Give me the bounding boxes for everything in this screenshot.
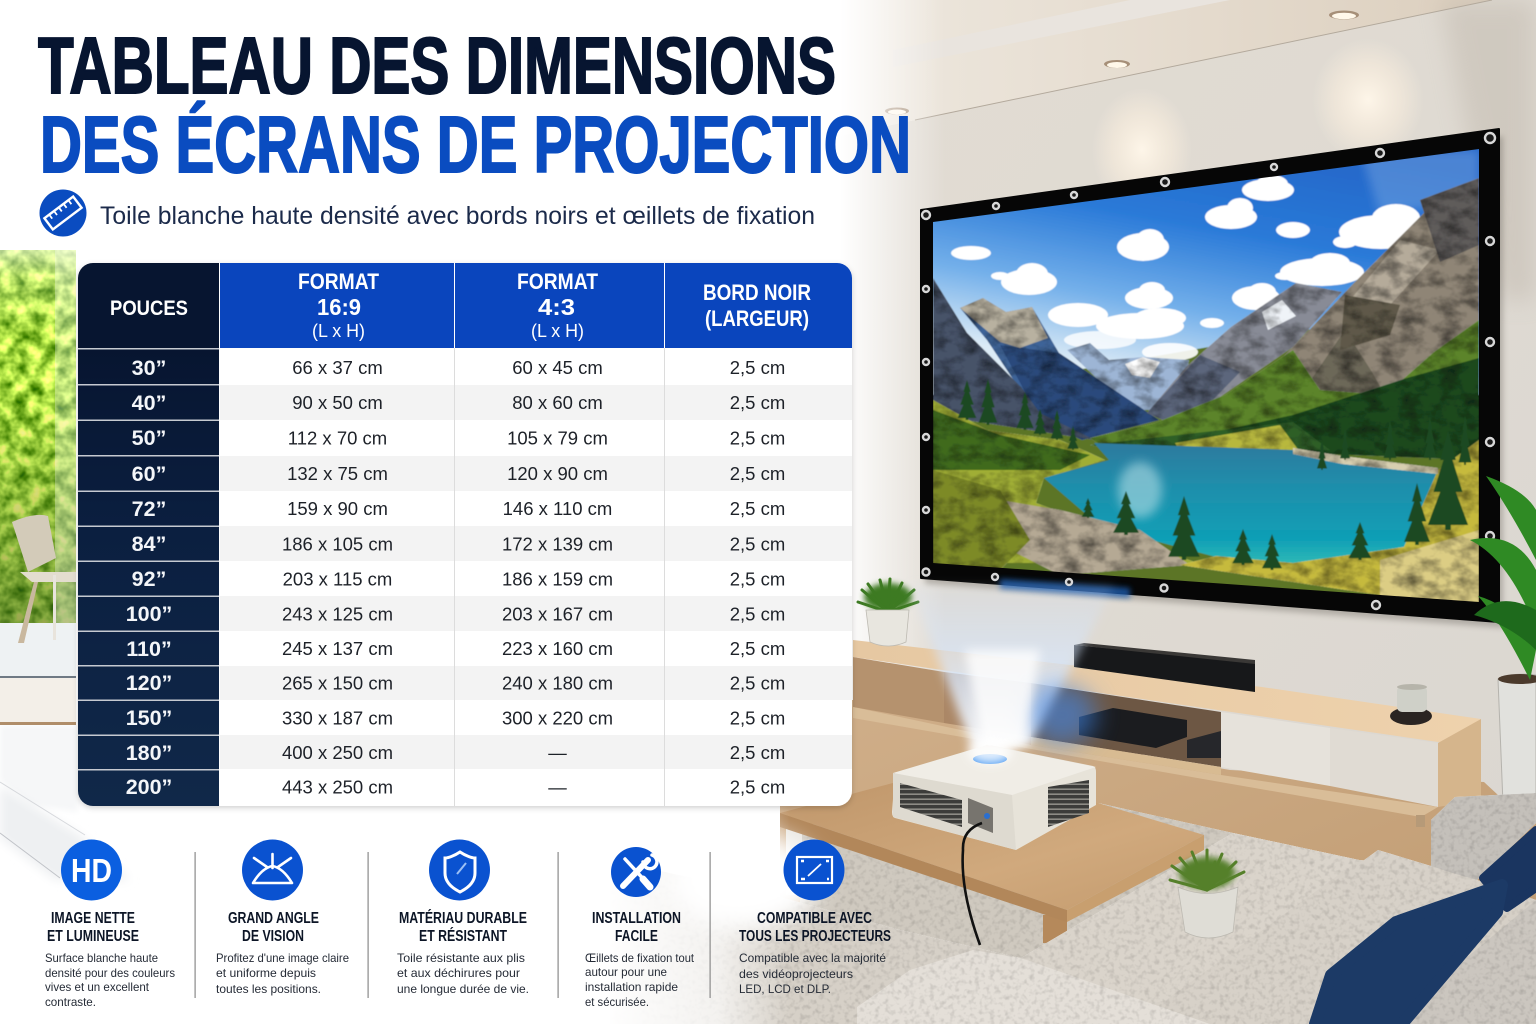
terrace floor xyxy=(0,623,76,678)
description: Toile résistante aux plis xyxy=(397,951,525,965)
table rows: 2,5 cm xyxy=(730,708,785,728)
feature dividers xyxy=(194,852,711,998)
description: densité pour des couleurs xyxy=(45,966,175,980)
right shore and foreground meadow xyxy=(1180,440,1479,610)
icon: viewing angle xyxy=(242,840,303,900)
description: vives et un excellent xyxy=(45,980,150,994)
screen picture: mountain lake xyxy=(930,145,1482,610)
table rows: 186 x 159 cm xyxy=(502,568,613,590)
rug xyxy=(800,803,1233,1000)
table rows: 203 x 167 cm xyxy=(502,604,613,624)
feature: installation facile xyxy=(585,847,695,1009)
plant on sofa xyxy=(1170,850,1244,938)
table rows: 300 x 220 cm xyxy=(502,708,613,728)
icon: shield xyxy=(429,840,490,900)
wall light glows xyxy=(1092,38,1424,212)
header: format 16:9 xyxy=(298,269,379,341)
description: autour pour une xyxy=(585,965,667,979)
background: room scene xyxy=(647,0,1536,1024)
header row backgrounds xyxy=(78,263,852,348)
table rows: 2,5 cm xyxy=(730,428,785,448)
media console xyxy=(853,640,1481,827)
ceiling xyxy=(840,0,1492,136)
table panel xyxy=(78,263,852,806)
table rows: 159 x 90 cm xyxy=(287,498,388,519)
blue light on screen border xyxy=(1000,579,1130,598)
header: format 16:9: 16:9 xyxy=(317,294,361,320)
header: format 16:9: (L x H) xyxy=(312,321,365,341)
table rows: 2,5 cm xyxy=(730,604,785,624)
table rows: 443 x 250 cm xyxy=(282,776,393,798)
header: format 4:3 xyxy=(517,269,598,341)
description: Compatible avec la majorité xyxy=(739,951,886,965)
description: Profitez d'une image claire xyxy=(216,951,349,965)
table rows: 72” xyxy=(132,497,166,521)
heading xyxy=(47,910,139,945)
table rows: 2,5 cm xyxy=(730,776,785,798)
table rows: 2,5 cm xyxy=(730,498,785,519)
navy cushions xyxy=(1315,830,1536,1024)
header: bord noir: BORD NOIR xyxy=(703,280,811,305)
heading: IMAGE NETTE xyxy=(51,910,135,927)
description: Surface blanche haute xyxy=(45,951,158,965)
icon: ruler xyxy=(40,190,86,236)
small box xyxy=(1187,731,1221,758)
table rows: 2,5 cm xyxy=(730,357,785,378)
large plant pot and leaves xyxy=(1470,476,1536,804)
heading: INSTALLATION xyxy=(592,910,681,927)
table rows: 30” xyxy=(132,356,166,380)
subtitle text: Toile blanche haute densité avec bords noirs et œillets de fixation xyxy=(100,202,815,230)
title line 1: TABLEAU DES DIMENSIONS xyxy=(38,21,836,110)
table rows: 180” xyxy=(126,741,172,765)
table rows: 2,5 cm xyxy=(730,534,785,554)
table rows: 100” xyxy=(126,602,172,626)
description: installation rapide xyxy=(585,980,678,994)
candle on tray xyxy=(1390,684,1432,725)
alternating row bands xyxy=(220,385,852,769)
header: format 4:3: 4:3 xyxy=(538,294,575,320)
header: format 4:3: FORMAT xyxy=(517,269,598,294)
small plant on console xyxy=(858,579,918,646)
subtitle row xyxy=(40,190,815,236)
heading xyxy=(739,910,891,945)
icon: wrench and screwdriver xyxy=(611,847,661,897)
description: toutes les positions. xyxy=(216,982,321,996)
clouds xyxy=(951,175,1423,361)
description xyxy=(585,951,695,1009)
ceiling downlights xyxy=(885,10,1359,114)
description: contraste. xyxy=(45,995,96,1009)
heading: DE VISION xyxy=(242,928,304,945)
table rows: 105 x 79 cm xyxy=(507,428,608,448)
header: format 4:3: (L x H) xyxy=(531,321,584,341)
column dividers xyxy=(454,348,665,806)
heading: GRAND ANGLE xyxy=(228,910,319,927)
table rows: 80 x 60 cm xyxy=(512,392,603,413)
rocky foreground path xyxy=(1006,500,1188,574)
table rows: 60” xyxy=(132,462,166,486)
table rows: 66 x 37 cm xyxy=(292,357,383,378)
left garden window xyxy=(0,222,76,725)
description xyxy=(216,951,349,996)
feature: grand angle xyxy=(216,840,349,996)
icon: HD xyxy=(61,840,122,900)
table rows: 400 x 250 cm xyxy=(282,742,393,763)
floor xyxy=(780,700,1536,1024)
table rows: 186 x 105 cm xyxy=(282,534,393,554)
description: et sécurisée. xyxy=(585,995,649,1009)
description: Œillets de fixation tout xyxy=(585,951,695,965)
wall whitening toward the left xyxy=(840,0,945,810)
lens xyxy=(973,754,1007,764)
vents xyxy=(900,783,962,827)
table rows: 203 x 115 cm xyxy=(283,568,392,590)
ports xyxy=(968,798,993,833)
header: format 16:9: FORMAT xyxy=(298,269,379,294)
description: une longue durée de vie. xyxy=(397,982,529,996)
heading xyxy=(228,910,319,945)
table rows: 150” xyxy=(126,706,172,730)
title xyxy=(38,21,911,189)
table rows: 200” xyxy=(126,775,172,799)
table rows: — xyxy=(548,776,567,798)
lake xyxy=(1044,443,1438,563)
table rows: — xyxy=(548,742,567,763)
table rows: 265 x 150 cm xyxy=(282,672,393,694)
table rows: 112 x 70 cm xyxy=(288,428,387,448)
table rows: 40” xyxy=(132,391,166,415)
feature: compatible xyxy=(739,840,891,996)
header: bord noir: (LARGEUR) xyxy=(705,306,809,331)
description xyxy=(397,951,529,996)
heading: COMPATIBLE AVEC xyxy=(757,910,872,927)
description: LED, LCD et DLP. xyxy=(739,982,831,996)
heading: FACILE xyxy=(615,928,658,945)
media player xyxy=(1079,708,1187,748)
table rows: 146 x 110 cm xyxy=(503,498,612,519)
table rows: 50” xyxy=(132,426,166,450)
description: des vidéoprojecteurs xyxy=(739,967,853,981)
heading xyxy=(592,910,681,945)
table rows: 330 x 187 cm xyxy=(282,708,393,728)
white fade overlay xyxy=(0,0,820,1024)
heading: ET LUMINEUSE xyxy=(47,928,139,945)
heading xyxy=(399,908,527,945)
sofa xyxy=(610,793,1536,1024)
table rows: 120 x 90 cm xyxy=(507,463,608,484)
heading: TOUS LES PROJECTEURS xyxy=(739,928,891,945)
heading: ET RÉSISTANT xyxy=(419,926,507,945)
table rows: 2,5 cm xyxy=(730,672,785,694)
table rows: 2,5 cm xyxy=(730,568,785,590)
conifer trees xyxy=(958,379,1471,570)
wall xyxy=(840,0,1536,810)
table rows: 60 x 45 cm xyxy=(512,357,603,378)
projector light beam xyxy=(910,585,1115,755)
table rows: 2,5 cm xyxy=(730,742,785,763)
icon: HD: HD xyxy=(71,852,112,889)
header: pouces: POUCES xyxy=(110,297,188,320)
screen grommets xyxy=(922,133,1495,617)
floor diagonal lines bottom left xyxy=(0,725,130,880)
icon: screen size arrows xyxy=(784,840,844,900)
table rows: 90 x 50 cm xyxy=(292,392,383,413)
screen shadow xyxy=(925,136,1503,628)
lake left shore xyxy=(933,400,1197,575)
description xyxy=(739,951,886,996)
description: et aux déchirures pour xyxy=(397,966,520,980)
soundbar xyxy=(1074,645,1255,692)
table rows: 2,5 cm xyxy=(730,392,785,413)
table rows: 245 x 137 cm xyxy=(282,638,393,659)
table rows: 92” xyxy=(132,567,166,591)
table rows: 240 x 180 cm xyxy=(502,672,613,694)
title line 2: DES ÉCRANS DE PROJECTION xyxy=(40,100,911,189)
terrace chair xyxy=(12,515,76,643)
table rows: 120” xyxy=(126,671,172,695)
power cable xyxy=(963,823,982,945)
feature: materiau durable xyxy=(397,840,529,996)
table rows: 110” xyxy=(126,637,172,661)
table rows: 2,5 cm xyxy=(730,638,785,659)
heading: MATÉRIAU DURABLE xyxy=(399,908,527,927)
projection screen xyxy=(921,129,1499,622)
feature: image nette xyxy=(45,840,175,1009)
table rows: 243 x 125 cm xyxy=(282,604,393,624)
table rows: 84” xyxy=(132,532,166,556)
projector xyxy=(892,740,1096,945)
table rows xyxy=(126,356,785,799)
description: et uniforme depuis xyxy=(216,966,316,980)
green valley slopes xyxy=(1090,320,1479,460)
table rows: 2,5 cm xyxy=(730,463,785,484)
inches column xyxy=(78,348,219,806)
table rows: 172 x 139 cm xyxy=(502,534,613,554)
mountains xyxy=(933,178,1479,440)
table rows: 223 x 160 cm xyxy=(502,638,613,659)
header: bord noir xyxy=(703,280,811,331)
coffee table xyxy=(780,783,1204,943)
table rows: 132 x 75 cm xyxy=(287,463,388,484)
description xyxy=(45,951,175,1009)
